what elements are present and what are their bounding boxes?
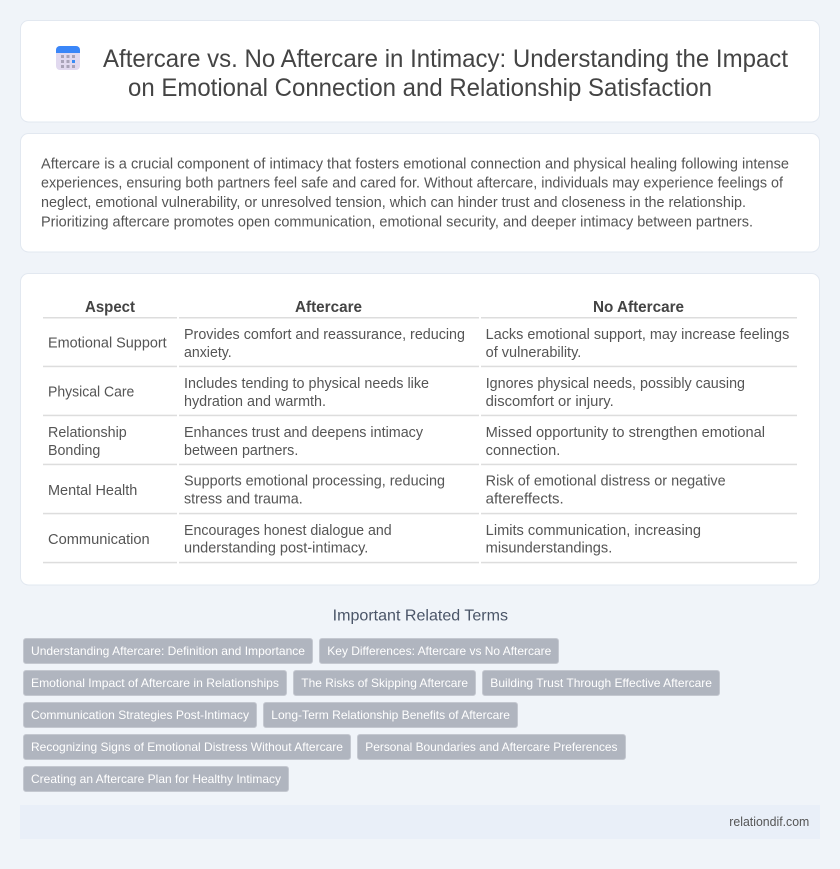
table row: physical care: Physical Care: [48, 385, 134, 401]
table row: physical care: [43, 376, 797, 416]
table row: relationship bonding: connection.: [486, 443, 560, 459]
table row: communication: Encourages honest dialogue and: [184, 523, 392, 539]
table row: emotional support: of vulnerability.: [486, 345, 581, 361]
tag: [358, 734, 626, 760]
tag: [482, 670, 720, 696]
tag: Key Differences: Aftercare vs No Aftercare: [327, 644, 552, 658]
table row: relationship bonding: [43, 425, 797, 465]
table row: mental health: stress and trauma.: [184, 492, 303, 508]
tag: [24, 702, 256, 728]
table row: communication: understanding post-intimacy.: [184, 541, 368, 557]
table row: emotional support: Provides comfort and reassurance, reducing: [184, 327, 465, 343]
tag: [320, 638, 558, 664]
tag: Emotional Impact of Aftercare in Relationships: [31, 676, 279, 690]
table row: physical care: discomfort or injury.: [486, 394, 614, 410]
tag: Creating an Aftercare Plan for Healthy Intimacy: [31, 772, 281, 786]
table row: communication: Limits communication, increasing: [486, 523, 701, 539]
section heading: Important Related Terms: [333, 608, 508, 625]
table row: mental health: [43, 474, 797, 514]
table row: emotional support: [43, 327, 797, 367]
table row: relationship bonding: Bonding: [48, 443, 100, 459]
panel: comparison table: [20, 274, 820, 585]
title: Aftercare vs. No Aftercare in Intimacy: Understanding the Impact: [103, 45, 788, 73]
tag: Recognizing Signs of Emotional Distress Without Aftercare: [31, 740, 343, 754]
title: [103, 45, 788, 102]
tag: [24, 766, 288, 792]
table header row: No Aftercare: [593, 299, 684, 316]
intro text block: Prioritizing aftercare promotes open communication, emotional security, and deeper intimacy between partners.: [41, 214, 753, 230]
panel: introduction: [20, 134, 820, 252]
tag: [24, 734, 350, 760]
table row: communication: [43, 523, 797, 563]
table header row: Aspect: [85, 299, 136, 316]
intro text block: Aftercare is a crucial component of intimacy that fosters emotional connection and physical healing following intense: [41, 156, 789, 172]
table row: mental health: Risk of emotional distress or negative: [486, 474, 726, 490]
intro text block: experiences, ensuring both partners feel safe and cared for. Without aftercare, individuals may experience feelings of: [41, 176, 784, 192]
table row: physical care: Ignores physical needs, possibly causing: [486, 376, 745, 392]
intro text block: [41, 156, 789, 230]
table header row: Aftercare: [295, 299, 362, 316]
table header row: [43, 299, 797, 318]
tag: Building Trust Through Effective Aftercare: [490, 676, 712, 690]
table row: emotional support: Lacks emotional support, may increase feelings: [486, 327, 789, 343]
tag: Personal Boundaries and Aftercare Preferences: [365, 740, 618, 754]
table row: relationship bonding: Relationship: [48, 425, 127, 441]
table row: mental health: aftereffects.: [486, 492, 564, 508]
tag: [294, 670, 476, 696]
table row: mental health: Mental Health: [48, 483, 137, 499]
icon: calendar: [56, 46, 80, 70]
table row: emotional support: anxiety.: [184, 345, 232, 361]
footer source text: relationdif.com: [729, 814, 809, 829]
tag: Communication Strategies Post-Intimacy: [31, 708, 249, 722]
table row: mental health: Supports emotional processing, reducing: [184, 474, 445, 490]
table row: relationship bonding: between partners.: [184, 443, 298, 459]
tag: The Risks of Skipping Aftercare: [301, 676, 468, 690]
tag: [24, 670, 286, 696]
table row: physical care: Includes tending to physical needs like: [184, 376, 429, 392]
table row: physical care: hydration and warmth.: [184, 394, 326, 410]
table row: emotional support: Emotional Support: [48, 336, 167, 352]
footer: [20, 805, 820, 839]
tag: [264, 702, 518, 728]
tag: Long-Term Relationship Benefits of Aftercare: [271, 708, 510, 722]
tag: [24, 638, 312, 664]
tag: Understanding Aftercare: Definition and Importance: [31, 644, 305, 658]
panel: important related terms: [24, 608, 720, 792]
table row: communication: Communication: [48, 532, 150, 548]
table row: relationship bonding: Missed opportunity to strengthen emotional: [486, 425, 765, 441]
table row: communication: misunderstandings.: [486, 541, 612, 557]
title: on Emotional Connection and Relationship Satisfaction: [128, 74, 712, 102]
panel: title header: [20, 20, 820, 122]
table row: relationship bonding: Enhances trust and deepens intimacy: [184, 425, 424, 441]
intro text block: neglect, emotional vulnerability, or unresolved tension, which can hinder trust and closeness in the relationship.: [41, 195, 746, 211]
